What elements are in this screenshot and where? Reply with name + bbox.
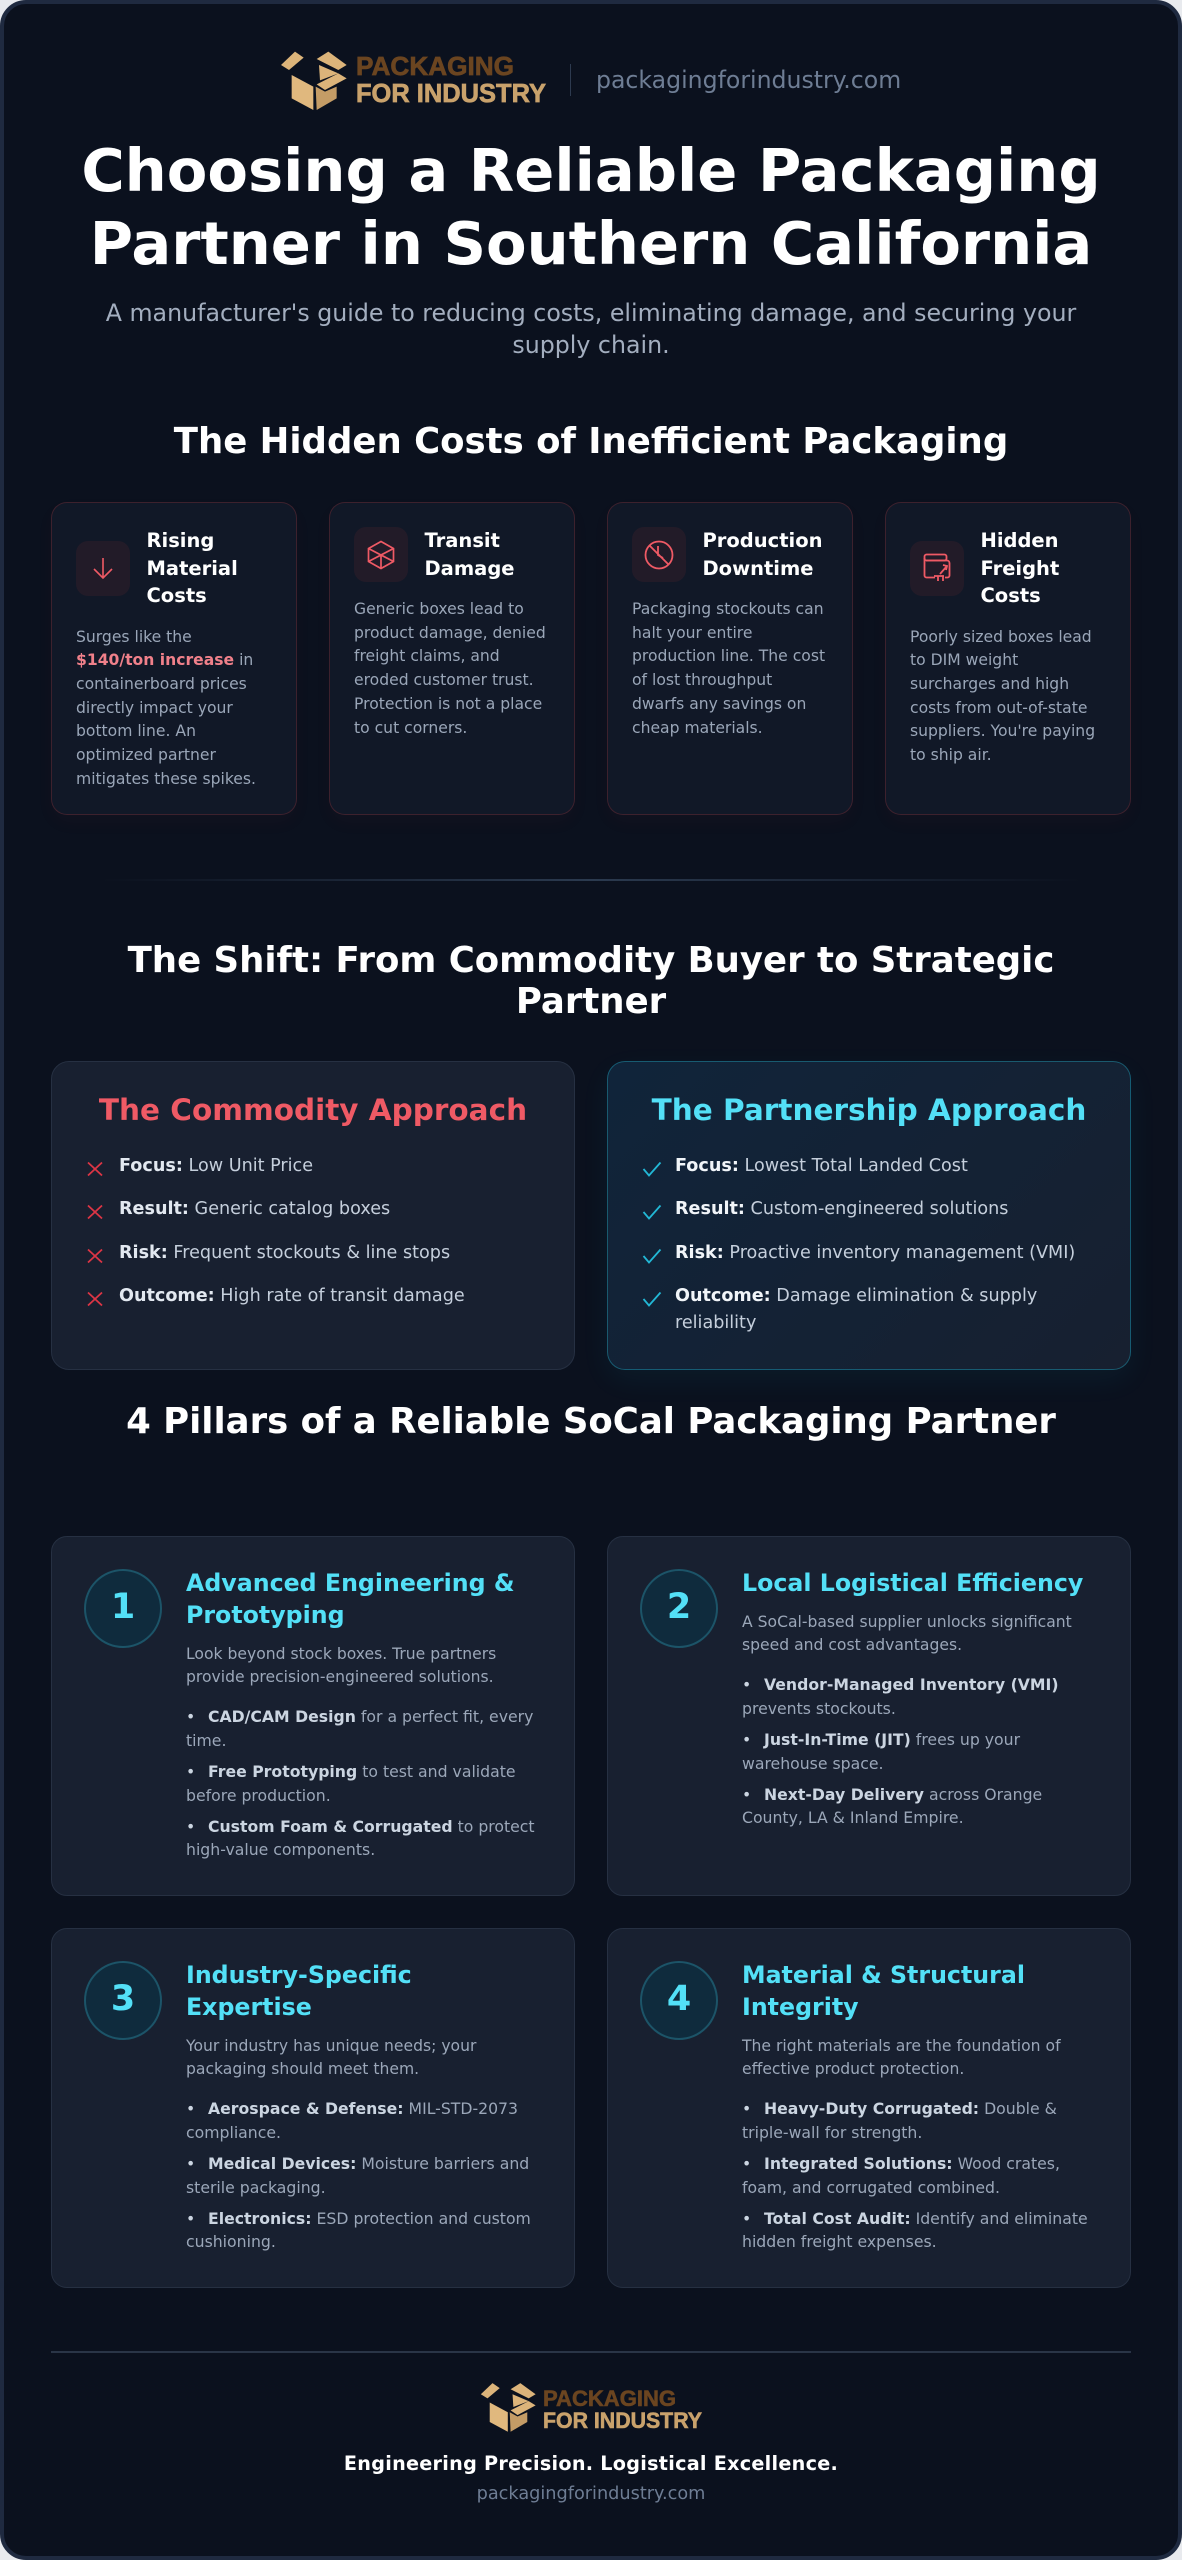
pillar 3 content: • bbox=[186, 2209, 195, 2228]
header domain: packagingforindustry.com bbox=[596, 66, 901, 94]
card header: Transit Damage bbox=[424, 529, 515, 580]
pillar 3 content: Electronics: ESD protection and custom cushioning. bbox=[186, 2209, 531, 2251]
heading: the shift: The Shift: From Commodity Buyer to Strategic bbox=[128, 940, 1054, 981]
footer url: packagingforindustry.com bbox=[477, 2484, 705, 2504]
pillar 1 content bbox=[186, 1569, 535, 1859]
pillar 4 content: The right materials are the foundation of effective product protection. bbox=[742, 2036, 1061, 2078]
pillar 2 content: • bbox=[742, 1730, 751, 1749]
subtitle: A manufacturer's guide to reducing costs, eliminating damage, and securing your bbox=[106, 299, 1076, 327]
card header bbox=[76, 529, 238, 607]
card text: Packaging stockouts can halt your entire production line. The cost of lost throughput dwarfs any savings on cheap materials. bbox=[632, 600, 825, 737]
pillar 1 content: Look beyond stock boxes. True partners provide precision-engineered solutions. bbox=[186, 1644, 496, 1686]
panel: rising material costs bbox=[51, 502, 297, 815]
panel: pillar 4 bbox=[607, 1928, 1131, 2288]
pillar 3 content: • bbox=[186, 2099, 195, 2118]
footer tagline: Engineering Precision. Logistical Excellence. bbox=[344, 2452, 838, 2475]
pillar 4 content: Total Cost Audit: Identify and eliminate hidden freight expenses. bbox=[742, 2209, 1088, 2251]
partnership list bbox=[642, 1156, 1075, 1333]
commodity list: Focus: Low Unit Price bbox=[119, 1156, 313, 1176]
pillar 1 content: CAD/CAM Design for a perfect fit, every time. bbox=[186, 1707, 533, 1750]
panel: pillar 2 bbox=[607, 1536, 1131, 1896]
pillar 4 content: Heavy-Duty Corrugated: Double & triple-wall for strength. bbox=[742, 2099, 1057, 2142]
footer logo: PACKAGING bbox=[543, 2386, 676, 2411]
pillar 2 content: Just-In-Time (JIT) frees up your warehouse space. bbox=[742, 1730, 1020, 1773]
pillar 2 content: A SoCal-based supplier unlocks significant speed and cost advantages. bbox=[742, 1612, 1072, 1654]
pillar 3 content: Your industry has unique needs; your packaging should meet them. bbox=[186, 2036, 476, 2078]
pillar 3 content: Industry-Specific Expertise bbox=[186, 1961, 412, 2021]
partnership list: Risk: Proactive inventory management (VMI) bbox=[675, 1243, 1075, 1263]
pillar 3 content: Aerospace & Defense: MIL-STD-2073 compliance. bbox=[186, 2099, 518, 2142]
pillar 4 content bbox=[742, 1961, 1088, 2251]
number badge 1 bbox=[84, 1569, 162, 1648]
partnership list: Focus: Lowest Total Landed Cost bbox=[675, 1156, 968, 1176]
commodity list bbox=[88, 1156, 465, 1306]
number badge 3 bbox=[84, 1961, 162, 2040]
pillar 2 content: Local Logistical Efficiency bbox=[742, 1569, 1083, 1597]
commodity list: Result: Generic catalog boxes bbox=[119, 1199, 390, 1219]
partnership heading: The Partnership Approach bbox=[652, 1093, 1086, 1127]
heading: the shift bbox=[128, 940, 1054, 1022]
subtitle: supply chain. bbox=[512, 331, 670, 359]
number badge 4 bbox=[640, 1961, 718, 2040]
card header bbox=[632, 527, 822, 582]
number badge 4: 4 bbox=[667, 1979, 691, 2019]
title: Choosing a Reliable Packaging bbox=[81, 136, 1101, 204]
card text: Surges like the $140/ton increase in containerboard prices directly impact your bottom line. An optimized partner mitigates these spikes. bbox=[76, 628, 256, 788]
panel: partnership approach bbox=[607, 1061, 1131, 1370]
title: Partner in Southern California bbox=[90, 208, 1092, 278]
heading: the shift: Partner bbox=[516, 981, 666, 1022]
card header: Rising Material Costs bbox=[146, 529, 238, 607]
heading: hidden costs: The Hidden Costs of Inefficient Packaging bbox=[174, 421, 1008, 462]
pillar 1 content: • bbox=[186, 1817, 195, 1836]
header logo: PACKAGING bbox=[356, 51, 514, 81]
card text: Generic boxes lead to product damage, denied freight claims, and eroded customer trust. Protection is not a place to cut corners. bbox=[354, 600, 546, 737]
panel: commodity approach bbox=[51, 1061, 575, 1370]
commodity list: Outcome: High rate of transit damage bbox=[119, 1286, 465, 1306]
commodity list: Risk: Frequent stockouts & line stops bbox=[119, 1243, 450, 1263]
pillar 1 content: Advanced Engineering & Prototyping bbox=[186, 1569, 515, 1629]
card header bbox=[354, 527, 515, 582]
panel: pillar 1 bbox=[51, 1536, 575, 1896]
commodity heading: The Commodity Approach bbox=[99, 1093, 527, 1127]
pillar 3 content: Medical Devices: Moisture barriers and sterile packaging. bbox=[186, 2154, 529, 2197]
panel: production downtime bbox=[607, 502, 853, 815]
pillar 2 content: Vendor-Managed Inventory (VMI) prevents stockouts. bbox=[742, 1675, 1059, 1718]
pillar 1 content: Custom Foam & Corrugated to protect high-value components. bbox=[186, 1817, 535, 1859]
card header: Production Downtime bbox=[702, 529, 822, 580]
pillar 1 content: Free Prototyping to test and validate before production. bbox=[186, 1762, 516, 1805]
footer logo bbox=[480, 2383, 702, 2433]
subtitle bbox=[106, 299, 1076, 359]
pillar 1 content: • bbox=[186, 1707, 195, 1726]
pillar 4 content: • bbox=[742, 2154, 751, 2173]
number badge 2: 2 bbox=[667, 1587, 691, 1627]
icon: freight wallet bbox=[910, 541, 964, 596]
icon: box bbox=[354, 527, 408, 582]
header logo: FOR INDUSTRY bbox=[356, 78, 546, 108]
pillar 4 content: • bbox=[742, 2209, 751, 2228]
number badge 1: 1 bbox=[111, 1587, 135, 1627]
card text: Poorly sized boxes lead to DIM weight surcharges and high costs from out-of-state suppliers. You're paying to ship air. bbox=[910, 628, 1095, 764]
pillar 3 content: • bbox=[186, 2154, 195, 2173]
header logo bbox=[281, 51, 546, 110]
pillar 1 content: • bbox=[186, 1762, 195, 1781]
number badge 3: 3 bbox=[111, 1979, 135, 2019]
pillar 2 content bbox=[742, 1569, 1083, 1827]
footer logo: FOR INDUSTRY bbox=[543, 2408, 702, 2433]
pillar 4 content: Integrated Solutions: Wood crates, foam, and corrugated combined. bbox=[742, 2154, 1060, 2197]
pillar 2 content: • bbox=[742, 1785, 751, 1804]
pillar 2 content: • bbox=[742, 1675, 751, 1694]
icon: down arrow bbox=[76, 541, 130, 596]
partnership list: Result: Custom-engineered solutions bbox=[675, 1199, 1008, 1219]
panel: hidden freight costs bbox=[885, 502, 1131, 815]
number badge 2 bbox=[640, 1569, 718, 1648]
title bbox=[81, 136, 1101, 278]
pillar 3 content bbox=[186, 1961, 531, 2251]
panel: transit damage bbox=[329, 502, 575, 815]
pillar 4 content: Material & Structural Integrity bbox=[742, 1961, 1025, 2021]
icon: stopped clock bbox=[632, 527, 686, 582]
pillar 4 content: • bbox=[742, 2099, 751, 2118]
partnership list: Outcome: Damage elimination & supply reliability bbox=[675, 1286, 1037, 1333]
card header bbox=[910, 529, 1059, 607]
heading: 4 pillars: 4 Pillars of a Reliable SoCal Packaging Partner bbox=[126, 1401, 1056, 1442]
pillar 2 content: Next-Day Delivery across Orange County, LA & Inland Empire. bbox=[742, 1785, 1042, 1827]
card header: Hidden Freight Costs bbox=[980, 529, 1059, 607]
panel: pillar 3 bbox=[51, 1928, 575, 2288]
